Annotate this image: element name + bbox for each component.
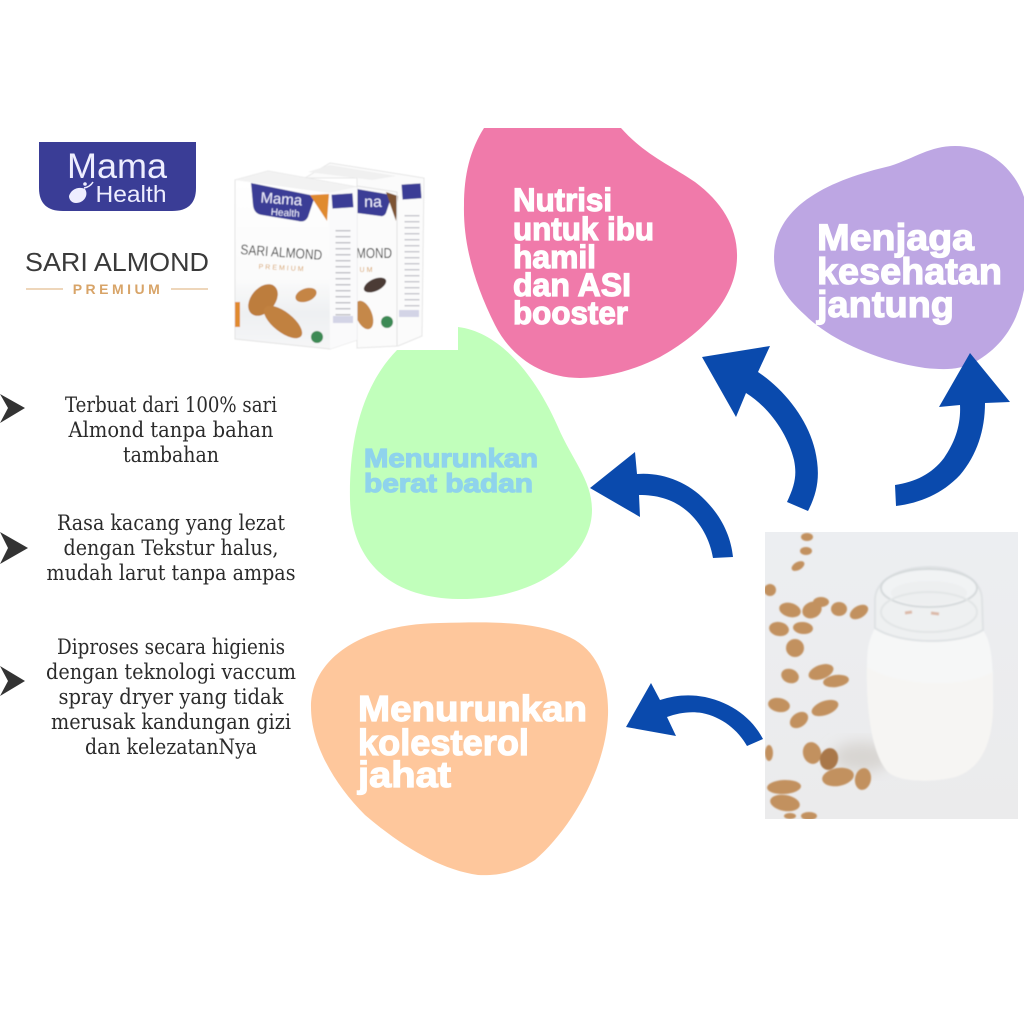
back box: UM: [360, 267, 374, 274]
feature text 2: mudah larut tanpa ampas: [46, 561, 296, 585]
arrow: to purple blob: [895, 353, 1010, 506]
arrow: to green blob: [590, 452, 733, 558]
feature text 2: [46, 511, 296, 585]
feature text 2: Rasa kacang yang lezat: [57, 511, 286, 535]
benefit blob: green: [350, 327, 592, 599]
front box: PREMIUM: [258, 264, 306, 273]
benefit text: Menjaga: [816, 217, 1002, 325]
feature text 3: dan kelezatanNya: [85, 735, 257, 759]
benefit text: Menurunkan kolesterol jahat: kolesterol: [358, 722, 529, 763]
feature text 3: merusak kandungan gizi: [51, 710, 291, 734]
product name: Sari Almond Premium: [25, 247, 209, 297]
benefit text: Nutrisi: hamil: [513, 239, 596, 275]
product name: Sari Almond Premium: PREMIUM: [73, 281, 163, 297]
benefit text: Nutrisi: dan ASI: [513, 267, 631, 303]
front box: SARI ALMOND: [240, 241, 323, 263]
feature text 3: spray dryer yang tidak: [58, 685, 284, 709]
feature text 3: dengan teknologi vaccum: [46, 660, 296, 684]
photo: almond milk jar: [764, 532, 1018, 820]
feature text 3: Diproses secara higienis: [57, 635, 285, 659]
benefit text: Menjaga: jantung: [816, 284, 954, 325]
feature 2: [0, 511, 296, 585]
brand logo: Mama Health: [39, 142, 196, 211]
benefit text: Menjaga: Menjaga: [817, 217, 974, 258]
benefit blob: purple: [774, 146, 1024, 369]
back box: [305, 163, 424, 348]
product boxes: [235, 163, 424, 349]
icon: chevron 3: [0, 666, 25, 696]
benefit text: Menurunkan berat badan: berat badan: [364, 468, 533, 498]
benefit text: Menurunkan kolesterol jahat: jahat: [357, 754, 451, 795]
feature text 1: Almond tanpa bahan: [68, 418, 274, 442]
icon: chevron 1: [0, 394, 25, 423]
feature text 1: [65, 393, 277, 467]
feature list: [0, 393, 296, 759]
benefit text: Menurunkan berat badan: Menurunkan: [364, 443, 538, 473]
feature text 3: [46, 635, 296, 759]
feature text 1: Terbuat dari 100% sari: [65, 393, 277, 417]
back box: na: [364, 194, 382, 211]
benefit text: Menurunkan kolesterol jahat: [357, 688, 587, 795]
product name: Sari Almond Premium: SARI ALMOND: [25, 247, 209, 277]
brand logo: Mama Health: Mama: [67, 147, 168, 186]
brand logo: Mama Health: Health: [96, 181, 166, 207]
benefit blob: pink: [464, 128, 737, 378]
almonds: [764, 533, 873, 820]
front box: [235, 171, 357, 349]
front box: Health: [270, 207, 300, 220]
feature text 2: dengan Tekstur halus,: [64, 536, 278, 560]
icon: chevron 2: [0, 532, 28, 564]
arrow: to pink blob: [702, 346, 818, 511]
benefit text: Menjaga: kesehatan: [817, 251, 1002, 292]
feature 3: [0, 635, 296, 759]
shadow: [832, 742, 892, 772]
arrow: to orange blob: [626, 683, 763, 746]
benefit text: Nutrisi: untuk ibu: [513, 211, 654, 247]
feature text 1: tambahan: [123, 443, 219, 467]
benefit text: Menurunkan kolesterol jahat: Menurunkan: [358, 688, 587, 729]
benefit blob: orange: [311, 622, 608, 875]
benefit text: Menurunkan berat badan: [364, 443, 538, 498]
back box: MOND: [356, 245, 392, 262]
benefit text: Nutrisi: Nutrisi: [513, 182, 612, 218]
feature 1: [0, 393, 277, 467]
jar: [867, 567, 993, 781]
benefit text: Nutrisi: booster: [513, 295, 628, 331]
front box: Mama: [260, 190, 303, 209]
benefit text: Nutrisi: [513, 182, 654, 331]
